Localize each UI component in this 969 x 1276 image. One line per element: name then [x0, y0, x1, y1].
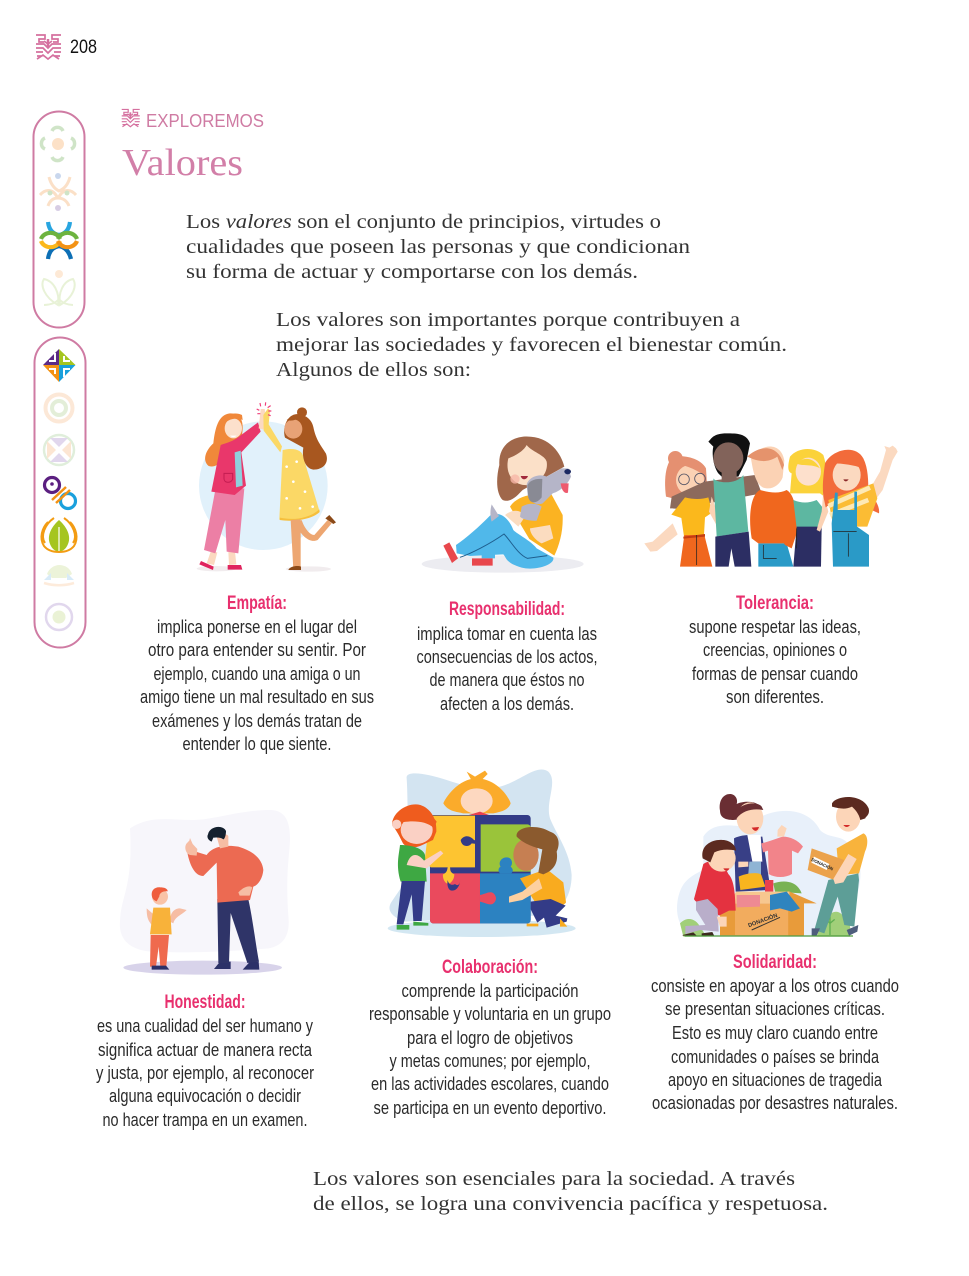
intro paragraph: Los valores son el conjunto de principios, virtudes o: [186, 211, 661, 233]
intro paragraph: cualidades que poseen las personas y que condicionan: [186, 236, 690, 258]
text block: Colaboración: comprende la participación: [402, 980, 578, 1001]
closing paragraph: de ellos, se logra una convivencia pacífica y respetuosa.: [313, 1193, 828, 1215]
page number: 208: [70, 37, 97, 58]
icon: faded arcs: [40, 173, 76, 211]
intro paragraph: su forma de actuar y comportarse con los demás.: [186, 261, 638, 283]
text block: Honestidad: significa actuar de manera recta: [98, 1039, 313, 1060]
text block: Solidaridad: [651, 952, 899, 1113]
second paragraph: [276, 309, 787, 381]
illustration: collaboration puzzle: [388, 770, 576, 937]
text block: Solidaridad: apoyo en situaciones de tragedia: [668, 1069, 883, 1090]
icon: leaf lotus: [41, 518, 77, 552]
text block: Empatía: implica ponerse en el lugar del: [157, 616, 357, 637]
icon: faded shell: [44, 565, 74, 585]
text block: Empatía: entender lo que siente.: [182, 733, 332, 754]
illustration: tolerance group of friends: [644, 433, 898, 567]
text block: Responsabilidad: implica tomar en cuenta las: [417, 623, 597, 644]
text block: Empatía: Empatía:: [227, 593, 287, 614]
second paragraph: Los valores son importantes porque contribuyen a: [276, 309, 740, 331]
text block: Honestidad: Honestidad:: [164, 992, 246, 1013]
text block: Responsabilidad: consecuencias de los actos,: [416, 646, 598, 667]
text block: Tolerancia: supone respetar las ideas,: [689, 616, 861, 637]
text block: Colaboración: [369, 957, 611, 1118]
second paragraph: Algunos de ellos son:: [276, 359, 471, 381]
text block: Solidaridad: Solidaridad:: [733, 952, 817, 973]
section label: Exploremos: EXPLOREMOS: [146, 111, 264, 131]
icon: faded leaves: [43, 270, 75, 305]
second paragraph: mejorar las sociedades y favorecen el bienestar común.: [276, 334, 787, 356]
text block: Empatía: ejemplo, cuando una amiga o un: [154, 663, 360, 684]
icon: page ornament: [36, 35, 61, 59]
intro paragraph: [186, 211, 690, 283]
text block: Empatía: exámenes y los demás tratan de: [152, 710, 362, 731]
text block: Empatía: [140, 593, 374, 754]
text block: Colaboración: se participa en un evento deportivo.: [374, 1097, 606, 1118]
icon: colored diamond: [43, 349, 76, 382]
text block: Tolerancia: creencias, opiniones o: [703, 639, 847, 660]
text block: Colaboración: en las actividades escolares, cuando: [371, 1073, 609, 1094]
illustration: honesty man and child: [120, 810, 290, 975]
text block: Solidaridad: consiste en apoyar a los otros cuando: [651, 975, 899, 996]
text block: Empatía: otro para entender su sentir. Por: [148, 639, 366, 660]
text block: Honestidad: es una cualidad del ser humano y: [97, 1015, 314, 1036]
text block: Colaboración: responsable y voluntaria en un grupo: [369, 1003, 611, 1024]
text block: Solidaridad: ocasionadas por desastres naturales.: [652, 1092, 898, 1113]
closing paragraph: [313, 1168, 828, 1215]
text block: Honestidad: [96, 992, 314, 1130]
text block: Tolerancia: son diferentes.: [726, 686, 824, 707]
text block: Tolerancia: Tolerancia:: [736, 593, 814, 614]
illustration: solidarity donation: DONACIÓN: [811, 857, 834, 872]
text block: Responsabilidad: Responsabilidad:: [449, 599, 565, 620]
text block: Honestidad: alguna equivocación o decidir: [109, 1085, 301, 1106]
text block: Honestidad: no hacer trampa en un examen.: [102, 1109, 308, 1130]
title: Valores: [122, 142, 243, 184]
icon: colored interlocked arcs: [41, 222, 77, 259]
text block: Responsabilidad: [416, 599, 598, 714]
text block: Honestidad: y justa, por ejemplo, al reconocer: [96, 1062, 314, 1083]
icon: faded flower: [41, 127, 75, 161]
icon: rings with slashes: [44, 478, 76, 508]
panel: sidebar top pill: [34, 112, 84, 328]
text block: Solidaridad: comunidades o países se brinda: [671, 1046, 880, 1067]
icon: section ornament: [122, 109, 140, 127]
text block: Tolerancia: [689, 593, 861, 707]
illustration: responsibility girl hugging dog: [422, 437, 584, 573]
icon: faded ring: [46, 394, 72, 422]
text block: Empatía: amigo tiene un mal resultado en sus: [140, 686, 374, 707]
panel: sidebar bottom pill: [34, 338, 86, 648]
text block: Colaboración: y metas comunes; por ejemplo,: [390, 1050, 590, 1071]
text block: Tolerancia: formas de pensar cuando: [692, 663, 858, 684]
text block: Colaboración: para el logro de objetivos: [407, 1027, 573, 1048]
text block: Solidaridad: se presentan situaciones críticas.: [665, 998, 885, 1019]
text block: Colaboración: Colaboración:: [442, 957, 538, 978]
text block: Solidaridad: Esto es muy claro cuando entre: [672, 1022, 878, 1043]
icon: faded square circle: [44, 435, 74, 465]
text block: Responsabilidad: de manera que éstos no: [430, 669, 584, 690]
icon: faded circle: [46, 604, 72, 630]
closing paragraph: Los valores son esenciales para la sociedad. A través: [313, 1168, 795, 1190]
illustration: solidarity donation: DONACIÓN: [747, 911, 778, 929]
illustration: empathy high five: [197, 402, 336, 572]
text block: Responsabilidad: afecten a los demás.: [440, 693, 574, 714]
illustration: solidarity donation: [677, 794, 869, 937]
